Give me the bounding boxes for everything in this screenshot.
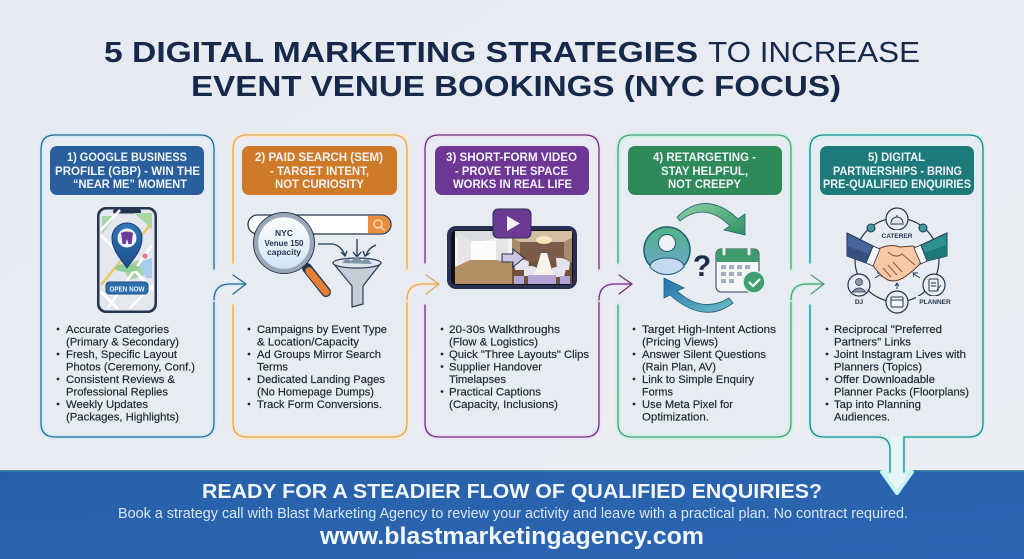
icon: search bar, magnifier and funnel: Venue 150 [264,238,304,248]
icon: partner network and handshake [847,208,954,313]
bullet list 1: (Packages, Highlights) [66,412,179,424]
bullet list 5: Tap into Planning [834,399,921,411]
call to action banner [0,470,1024,559]
bullet list 5 [826,324,969,424]
title: TO INCREASE [708,37,920,69]
bullet list 5: Partners" Links [834,336,911,348]
bullet list 1: (Primary & Secondary) [66,336,179,348]
bullet list 2: Terms [257,362,288,374]
heading 4: 4) RETARGETING - [653,150,756,164]
bullet list 1: Accurate Categories [66,324,169,336]
icon: phone with map pin: OPEN NOW [110,284,145,294]
bullet list 4: Forms [642,386,673,398]
heading 3: - PROVE THE SPACE [455,164,568,178]
icon: retargeting loop: ? [693,250,711,283]
heading 4: STAY HELPFUL, [661,164,748,178]
icon: partner network and handshake: PLANNER [919,299,951,306]
icon: search bar, magnifier and funnel [248,212,391,307]
bullet list 2: (No Homepage Dumps) [257,386,374,398]
heading 2: - TARGET INTENT, [270,164,369,178]
panel 1: Google Business Profile [41,135,214,437]
title [104,37,920,103]
arrow: panel 1 to panel 2 [214,275,246,300]
arrow: panel 2 to panel 3 [407,275,439,300]
bullet list 4: (Rain Plan, AV) [642,362,716,374]
heading 2: 2) PAID SEARCH (SEM) [255,150,383,164]
panel 2: Paid Search [233,135,407,437]
bullet list 1: Photos (Ceremony, Conf.) [66,362,195,374]
heading 1: “NEAR ME” MOMENT [73,177,187,191]
bullet list 2: Campaigns by Event Type [257,324,387,336]
heading 3: 3) SHORT-FORM VIDEO [446,150,577,164]
website url: www.blastmarketingagency.com [319,523,704,550]
icon: search bar, magnifier and funnel: NYC [275,228,293,238]
heading 2 [242,146,397,195]
heading 5: PARTNERSHIPS - BRING [833,164,962,178]
heading 5: 5) DIGITAL [868,150,926,164]
bullet list 5: Joint Instagram Lives with [834,349,966,361]
bullet list 2: Ad Groups Mirror Search [257,349,381,361]
bullet list 1 [57,324,195,424]
bullet list 3: (Flow & Logistics) [449,336,538,348]
bullet list 4: Answer Silent Questions [642,349,766,361]
title: EVENT VENUE BOOKINGS (NYC FOCUS) [191,71,841,103]
heading 4 [628,146,782,195]
icon: retargeting loop [644,203,765,312]
bullet list 2 [248,324,387,411]
bullet list 4: (Pricing Views) [642,336,718,348]
panel 4: Retargeting [618,135,791,437]
heading 2: NOT CURIOSITY [275,177,364,191]
arrow: panel 3 to panel 4 [599,275,632,300]
bullet list 4: Target High-Intent Actions [642,324,776,336]
bullet list 5: Offer Downloadable [834,374,935,386]
bullet list 4: Link to Simple Enquiry [642,374,754,386]
icon: partner network and handshake: CATERER [882,233,913,240]
bullet list 1: Weekly Updates [66,399,148,411]
bullet list 5: Audiences. [834,412,890,424]
bullet list 5: Planners (Topics) [834,362,922,374]
icon: partner network and handshake: DJ [855,299,864,306]
heading 5 [820,146,974,195]
bullet list 5: Reciprocal "Preferred [834,324,942,336]
bullet list 3: Timelapses [449,374,506,386]
arrow: panel 4 to panel 5 [791,275,824,300]
heading 1 [50,146,204,195]
heading 5: PRE-QUALIFIED ENQUIRIES [823,177,971,191]
heading 3 [435,146,589,195]
bullet list 4 [633,324,776,424]
banner text: Book a strategy call with Blast Marketing Agency to review your activity and leave with a practical plan. No contract required. [118,506,908,522]
heading 3: WORKS IN REAL LIFE [453,177,572,191]
heading 1: 1) GOOGLE BUSINESS [67,150,187,164]
banner heading: READY FOR A STEADIER FLOW OF QUALIFIED ENQUIRIES? [202,481,822,503]
bullet list 2: & Location/Capacity [257,336,359,348]
panel 3: Short-form video [425,135,599,437]
bullet list 3: Practical Captions [449,386,541,398]
icon: phone with map pin [97,207,157,313]
bullet list 2: Track Form Conversions. [257,399,382,411]
bullet list 1: Fresh, Specific Layout [66,349,178,361]
bullet list 4: Use Meta Pixel for [642,399,733,411]
heading 1: PROFILE (GBP) - WIN THE [55,164,200,178]
icon: search bar, magnifier and funnel: capacity [267,247,301,257]
bullet list 1: Consistent Reviews & [66,374,175,386]
bullet list 3: Supplier Handover [449,362,542,374]
bullet list 3: 20-30s Walkthroughs [449,324,560,336]
bullet list 3: (Capacity, Inclusions) [449,399,558,411]
bullet list 3 [441,324,589,411]
panel 5: Digital partnerships [810,135,983,493]
bullet list 3: Quick "Three Layouts" Clips [449,349,589,361]
bullet list 5: Planner Packs (Floorplans) [834,386,969,398]
bullet list 1: Professional Replies [66,386,168,398]
bullet list 2: Dedicated Landing Pages [257,374,385,386]
bullet list 4: Optimization. [642,412,709,424]
title: 5 DIGITAL MARKETING STRATEGIES [104,37,698,69]
heading 4: NOT CREEPY [668,177,741,191]
icon: phone video before and after [447,209,577,289]
